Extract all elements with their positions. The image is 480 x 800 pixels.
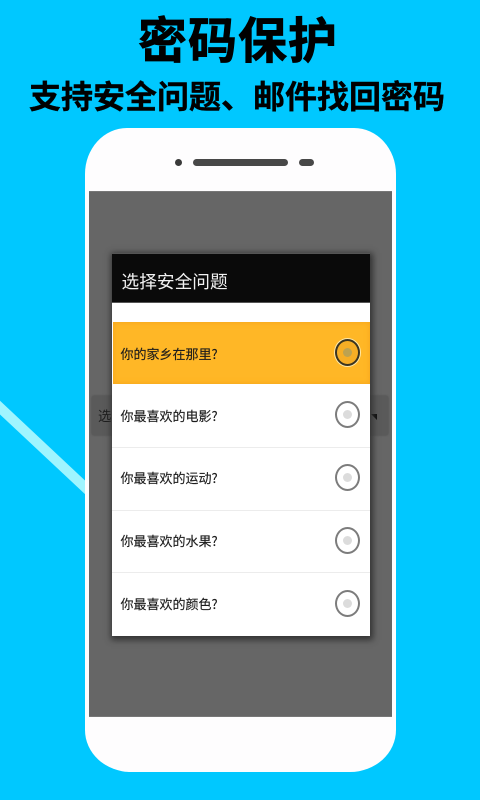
option: selected: [113, 322, 370, 384]
dropdown behind dialog: [92, 396, 388, 435]
dialog title: 选择安全问题: [122, 272, 228, 292]
dropdown label: 选: [98, 409, 112, 424]
screen: [89, 191, 392, 717]
subtitle: 支持安全问题、邮件找回密码: [29, 79, 445, 115]
option: colour: [120, 590, 360, 617]
decorative light beam: [0, 400, 85, 494]
option: movie: [120, 401, 360, 428]
option label: 你的家乡在那里?: [120, 344, 218, 363]
option: fruit: [120, 527, 360, 554]
icon: radio: [335, 527, 360, 554]
icon: speaker: [193, 159, 288, 166]
dialog: [112, 253, 370, 636]
dialog header: [112, 253, 370, 303]
icon: dropdown arrow: [371, 414, 377, 420]
option label: 你最喜欢的电影?: [120, 406, 218, 425]
icon: sensor: [299, 159, 314, 166]
icon: radio: [335, 464, 360, 491]
option label: 你最喜欢的颜色?: [120, 594, 218, 613]
icon: radio: [335, 401, 360, 428]
icon: front camera: [175, 159, 182, 166]
icon: radio: [335, 590, 360, 617]
title: 密码保护: [138, 15, 338, 69]
icon: radio selected: [335, 339, 360, 366]
phone: [85, 128, 396, 772]
option: sport: [120, 464, 360, 491]
option label: 你最喜欢的水果?: [120, 531, 218, 550]
option label: 你最喜欢的运动?: [120, 468, 218, 487]
